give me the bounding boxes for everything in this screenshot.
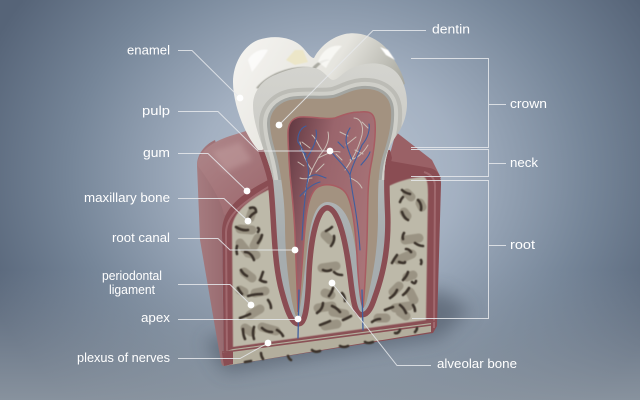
label: plexus of nerves: plexus of nerves <box>77 351 170 365</box>
crown back enamel <box>233 33 405 150</box>
shadow under block <box>205 290 470 372</box>
pulp chamber <box>288 112 375 312</box>
label: periodontal ligament: periodontal <box>102 269 162 283</box>
block left side face <box>197 140 232 366</box>
label: pulp <box>142 104 333 154</box>
label: maxillary bone: maxillary bone <box>84 191 170 205</box>
crown back shading in occlusal groove <box>256 59 330 90</box>
label: dentin <box>276 22 470 128</box>
periodontal ligament red band <box>258 150 392 326</box>
bracket: neck: neck <box>510 156 539 170</box>
label: enamel <box>127 44 243 101</box>
label: plexus of nerves <box>77 340 271 365</box>
label: root canal: root canal <box>112 231 170 245</box>
pulp nerves, blue <box>298 124 370 338</box>
bracket: root <box>411 180 536 318</box>
pulp nerves, white <box>298 118 368 195</box>
floor <box>0 270 640 400</box>
label: apex <box>141 311 301 325</box>
gum lighter stripes <box>226 172 435 360</box>
label: periodontal ligament <box>102 269 254 308</box>
block gum top surface <box>197 126 300 215</box>
label: maxillary bone <box>84 191 251 224</box>
gum highlight <box>212 142 252 172</box>
block front gum face <box>222 160 441 366</box>
label: pulp: pulp <box>142 104 170 118</box>
bottom strip red lines <box>222 321 436 352</box>
label: enamel: enamel <box>127 44 170 58</box>
bone cavities, soft halos <box>240 193 422 332</box>
label: apex: apex <box>141 311 171 325</box>
label: alveolar bone: alveolar bone <box>437 357 517 371</box>
bracket: crown: crown <box>510 97 547 111</box>
dentin <box>270 89 391 316</box>
bracket: neck <box>411 150 539 176</box>
bone cavities, dark holes <box>236 190 423 362</box>
right gum top surface <box>385 132 441 178</box>
label: dentin: dentin <box>432 22 470 36</box>
bone panel <box>232 177 428 347</box>
bracket: root: root <box>510 238 536 252</box>
crown highlights <box>248 46 395 72</box>
bottom strip of bone <box>223 323 431 366</box>
label: alveolar bone <box>329 280 517 371</box>
bracket: crown <box>411 58 547 148</box>
tooth and bone block model <box>197 33 441 366</box>
enamel cut section and cementum <box>253 63 407 321</box>
label: periodontal ligament: ligament <box>109 283 156 297</box>
label: root canal <box>112 231 298 253</box>
label: gum <box>143 146 250 194</box>
label: gum: gum <box>143 146 170 160</box>
left gum foot <box>222 351 233 366</box>
